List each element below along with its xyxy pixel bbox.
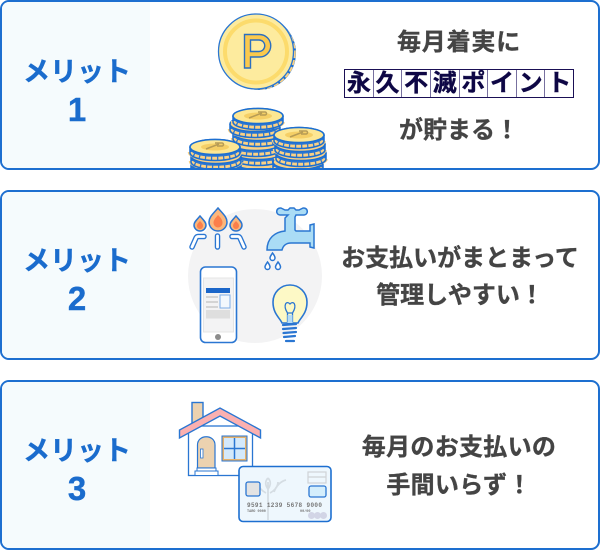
icon: stacks of gold coins — [188, 108, 328, 168]
text: permanent points boxed: イ — [490, 70, 514, 97]
icon: house and credit card: 00/00 — [300, 509, 311, 514]
panel: merit 3 — [0, 380, 600, 550]
text: merit 3 description: 毎月のお支払いの — [362, 434, 556, 461]
text: permanent points boxed: 久 — [375, 70, 399, 97]
heading: merit 3 label: メリット — [23, 436, 131, 466]
heading: merit 3 label — [23, 436, 131, 507]
text: permanent points boxed: ト — [547, 70, 571, 97]
heading: merit 3 label: 3 — [68, 470, 86, 507]
text: permanent points boxed: 不 — [404, 70, 428, 97]
text: permanent points boxed: 永 — [347, 70, 371, 97]
text: merit 3 description — [362, 434, 556, 499]
text: permanent points boxed: ポ — [461, 70, 485, 97]
heading: merit 1 label: メリット — [23, 57, 131, 87]
icon: house and credit card: 9591 1239 5678 9000 — [247, 502, 322, 509]
text: merit 2 description: 管理しやすい！ — [376, 282, 544, 309]
text: permanent points boxed: 滅 — [433, 70, 457, 97]
text: merit 1 line 3: が貯まる！ — [399, 117, 519, 144]
heading: merit 2 label — [23, 246, 131, 317]
text: permanent points boxed — [344, 69, 574, 98]
heading: merit 2 label: メリット — [23, 246, 131, 276]
text: merit 2 description — [341, 244, 579, 309]
text: merit 2 description: お支払いがまとまって — [341, 245, 579, 272]
text: merit 3 description: 手間いらず！ — [386, 472, 532, 499]
panel: merit 2 — [0, 190, 600, 360]
heading: merit 1 label: 1 — [68, 91, 86, 128]
text: permanent points boxed: ン — [519, 70, 543, 97]
heading: merit 1 label — [23, 57, 131, 128]
text: merit 1 line 1: 毎月着実に — [397, 29, 521, 56]
icon: house and credit card: TARO 0000 — [247, 510, 266, 514]
heading: merit 2 label: 2 — [68, 280, 86, 317]
panel: merit 1 — [0, 0, 600, 170]
